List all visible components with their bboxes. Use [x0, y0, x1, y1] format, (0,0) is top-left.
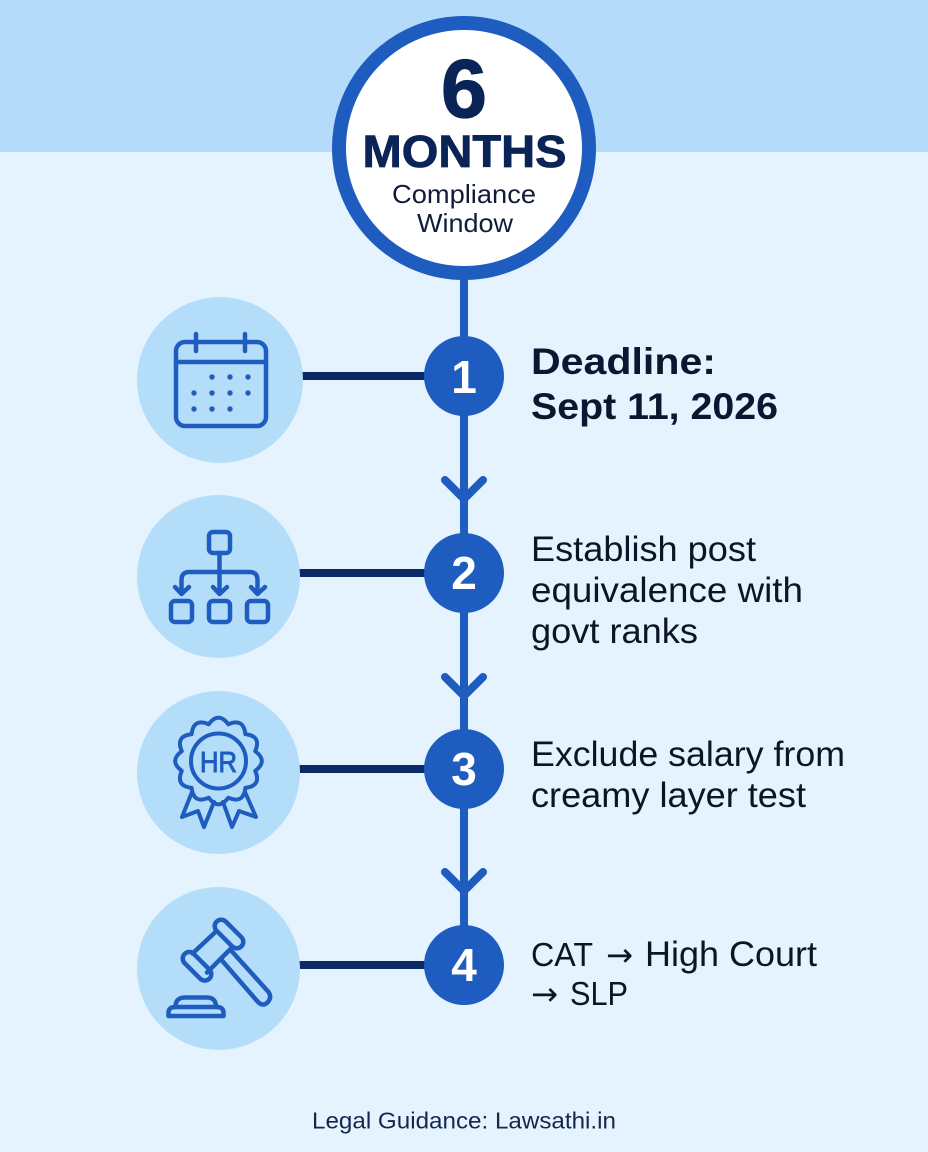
hero circle: 6 months compliance window — [339, 23, 589, 273]
step 1 text: deadline: Sept 11, 2026 — [531, 385, 778, 427]
step 3 node — [424, 729, 504, 809]
vertical timeline with arrows — [445, 270, 483, 965]
step 4 text: appeal route: → — [531, 975, 558, 1013]
step 4 text: appeal route: CAT — [531, 936, 593, 973]
header band — [0, 0, 928, 152]
icon: calendar — [137, 297, 303, 463]
step 1 node — [424, 336, 504, 416]
step 4 node: 4 — [451, 939, 477, 991]
icon: hierarchy — [137, 495, 300, 658]
icon: HR rosette badge — [137, 691, 300, 854]
footer credit: Legal Guidance: Lawsathi.in — [312, 1108, 616, 1134]
icon: gavel — [137, 887, 300, 1050]
step 4 text: appeal route — [531, 935, 817, 1013]
step 4 node — [424, 925, 504, 1005]
step 1 node: 1 — [451, 351, 477, 403]
hero unit: MONTHS — [362, 126, 566, 177]
step 3 text: salary exclusion: Exclude salary from — [531, 735, 845, 774]
step 3 text: salary exclusion — [531, 735, 845, 815]
step 4 text: appeal route: SLP — [570, 975, 628, 1012]
step 4 text: appeal route: High Court — [645, 935, 817, 974]
step 1 text: deadline: Deadline: — [531, 340, 716, 382]
icon: HR rosette badge: HR — [200, 747, 237, 779]
step 1 text: deadline — [531, 340, 778, 427]
hero number: 6 — [441, 42, 487, 135]
step 3 node: 3 — [451, 743, 477, 795]
step 2 node: 2 — [451, 547, 477, 599]
hero caption line 1: Compliance — [392, 179, 536, 209]
connector lines — [299, 372, 426, 969]
step 3 text: salary exclusion: creamy layer test — [531, 776, 806, 815]
step 2 text: post equivalence: equivalence with — [531, 571, 803, 610]
step 2 node — [424, 533, 504, 613]
step 2 text: post equivalence: Establish post — [531, 530, 756, 569]
hero caption line 2: Window — [417, 208, 513, 238]
step 2 text: post equivalence — [531, 530, 803, 651]
step 4 text: appeal route: → — [606, 936, 633, 974]
step 2 text: post equivalence: govt ranks — [531, 612, 698, 651]
